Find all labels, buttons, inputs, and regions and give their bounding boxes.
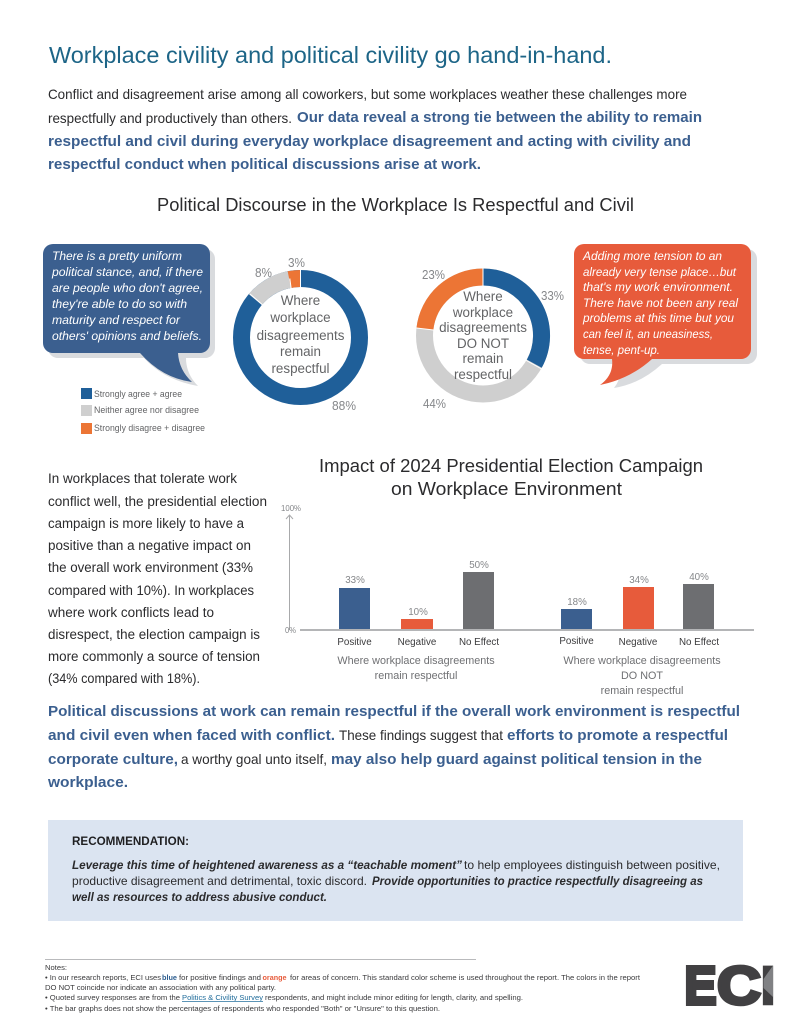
legend: Neither agree nor disagree [94, 405, 199, 415]
callout: negative quote: Adding more tension to an [582, 249, 722, 263]
callout: positive quote: maturity and respect for [52, 313, 181, 327]
bar chart: election impact: Where workplace disagreements [563, 655, 721, 667]
text block: election impact: more commonly a source of tension [48, 649, 260, 664]
conclusion paragraph: may also help guard against political tension in the [331, 751, 702, 768]
notes: for areas of concern. This standard color scheme is used throughout the report. The colors in the report [290, 973, 640, 982]
conclusion paragraph: corporate culture, [48, 751, 178, 768]
callout: positive quote [43, 244, 215, 386]
donut chart: disagreements do not remain respectful: workplace [452, 305, 513, 320]
heading: election impact chart [319, 456, 703, 499]
donut chart: disagreements do not remain respectful: 33% [541, 289, 564, 303]
donut chart: disagreements do not remain respectful: remain [463, 351, 503, 366]
callout: negative quote: problems at this time but you [582, 311, 734, 325]
heading: election impact chart: on Workplace Environment [391, 479, 622, 499]
bar chart: election impact: remain respectful [601, 685, 683, 697]
bar chart: election impact: 50% [469, 560, 489, 571]
text block: election impact: the overall work environment (33% [48, 560, 253, 575]
panel: recommendation: productive disagreement and detrimental, toxic discord. [72, 875, 367, 888]
donut chart: disagreements remain respectful: disagreements [257, 328, 345, 343]
notes: • The bar graphs does not show the percentages of respondents who responded "Both" or "Unsure" to this question. [45, 1004, 440, 1013]
panel: recommendation [48, 820, 743, 921]
text block: election impact: where work conflicts lead to [47, 605, 214, 620]
bar chart: election impact: 18% [567, 597, 587, 608]
text block: election impact: (34% compared with 18%). [48, 671, 200, 686]
conclusion paragraph: These findings suggest that [339, 728, 503, 743]
donut chart: disagreements do not remain respectful: 23% [422, 268, 445, 282]
donut chart: disagreements do not remain respectful: 44% [423, 397, 446, 411]
text block: election impact: disrespect, the election campaign is [48, 627, 260, 642]
notes: DO NOT coincide nor indicate an association with any political party. [45, 983, 276, 992]
notes: orange [262, 973, 286, 982]
donut chart: disagreements do not remain respectful: respectful [454, 367, 512, 382]
legend: Strongly agree + agree [94, 389, 182, 399]
bar chart: election impact: remain respectful [375, 670, 457, 682]
callout: negative quote: can feel it, an uneasiness, [583, 327, 713, 341]
callout: positive quote: are people who don't agree, [52, 281, 203, 295]
bar chart: election impact: 33% [345, 575, 365, 586]
donut chart: disagreements do not remain respectful: Where [463, 289, 503, 304]
text block: election impact: In workplaces that tolerate work [48, 471, 237, 486]
bar chart: election impact: No Effect [459, 637, 499, 648]
panel: recommendation: to help employees distinguish between positive, [464, 859, 720, 872]
donut chart: disagreements remain respectful: Where [281, 293, 320, 308]
conclusion paragraph: Political discussions at work can remain respectful if the overall work environment is respectful [48, 703, 740, 720]
bar chart: election impact: Positive [337, 637, 372, 648]
conclusion paragraph [47, 703, 740, 791]
notes: respondents, and might include minor editing for length, clarity, and spelling. [265, 993, 523, 1002]
notes: Politics & Civility Survey [182, 993, 263, 1002]
bar chart: election impact: Positive [559, 636, 594, 647]
intro paragraph: respectfully and productively than others. [48, 111, 292, 126]
bar chart: election impact: 34% [629, 575, 649, 586]
donut chart: disagreements remain respectful: respectful [271, 361, 330, 376]
donut chart: disagreements remain respectful: remain [280, 344, 321, 359]
notes: • Quoted survey responses are from the [45, 993, 180, 1002]
callout: negative quote: that's my work environment. [583, 280, 733, 294]
intro paragraph: Our data reveal a strong tie between the ability to remain [297, 109, 702, 126]
bar chart: election impact: Where workplace disagreements [337, 655, 495, 667]
text block: election impact: conflict well, the presidential election [48, 494, 267, 509]
notes: • In our research reports, ECI uses [45, 973, 161, 982]
bar chart: election impact: 100% [281, 504, 301, 513]
donut chart: disagreements remain respectful: workplace [269, 310, 331, 325]
heading: election impact chart: Impact of 2024 Presidential Election Campaign [319, 456, 703, 476]
callout: positive quote: they're able to do so with [52, 297, 187, 311]
conclusion paragraph: workplace. [47, 774, 128, 791]
bar chart: election impact [281, 504, 754, 697]
donut chart: disagreements remain respectful [242, 256, 360, 413]
callout: negative quote: tense, pent-up. [583, 343, 660, 357]
text block: election impact: campaign is more likely to have a [48, 516, 245, 531]
logo: ECI [684, 956, 776, 1016]
logo: ECI: I [760, 956, 776, 1016]
panel: recommendation: Leverage this time of heightened awareness as a “teachable moment” [72, 859, 462, 872]
legend: Strongly disagree + disagree [94, 423, 205, 433]
bar chart: election impact: Negative [619, 637, 658, 648]
text block: election impact: compared with 10%). In workplaces [48, 583, 254, 598]
intro paragraph [48, 87, 702, 173]
panel: recommendation: well as resources to address abusive conduct. [72, 891, 327, 904]
heading: political discourse: Political Discourse in the Workplace Is Respectful and Civil [157, 195, 634, 215]
conclusion paragraph: efforts to promote a respectful [507, 727, 728, 744]
callout: negative quote: There have not been any real [583, 296, 738, 310]
bar chart: election impact: 0% [285, 626, 296, 635]
text block: election impact [47, 471, 267, 686]
donut chart: disagreements remain respectful: 8% [255, 266, 272, 280]
callout: positive quote: others' opinions and beliefs. [52, 329, 202, 343]
callout: negative quote [574, 244, 757, 388]
bar chart: election impact: DO NOT [621, 670, 663, 682]
text block: election impact: positive than a negative impact on [48, 538, 251, 553]
callout: positive quote: There is a pretty uniform [52, 249, 182, 263]
bar chart: election impact: Negative [398, 637, 437, 648]
title: Workplace civility and political civility go hand-in-hand. [49, 42, 612, 68]
callout: positive quote: political stance, and, if there [51, 265, 203, 279]
intro paragraph: Conflict and disagreement arise among all coworkers, but some workplaces weather these challenges more [48, 87, 687, 102]
donut chart: disagreements remain respectful: 88% [332, 399, 356, 413]
notes [45, 959, 640, 1013]
notes: Notes: [45, 963, 67, 972]
bar chart: election impact: 40% [689, 572, 709, 583]
bar chart: election impact: No Effect [679, 637, 719, 648]
notes: for positive findings and [179, 973, 261, 982]
donut chart: disagreements do not remain respectful: DO NOT [457, 336, 509, 351]
conclusion paragraph: and civil even when faced with conflict. [48, 727, 335, 744]
legend [81, 388, 205, 434]
conclusion paragraph: a worthy goal unto itself, [181, 752, 327, 767]
donut chart: disagreements do not remain respectful: disagreements [439, 320, 527, 335]
intro paragraph: respectful conduct when political discussions arise at work. [48, 156, 481, 173]
logo: ECI: E [684, 956, 716, 1016]
logo: ECI: C [717, 956, 761, 1016]
notes: blue [162, 973, 177, 982]
donut chart: disagreements do not remain respectful [416, 268, 564, 411]
panel: recommendation: Provide opportunities to practice respectfully disagreeing as [372, 875, 704, 888]
bar chart: election impact: 10% [408, 607, 428, 618]
callout: negative quote: already very tense place…but [583, 265, 737, 279]
donut chart: disagreements remain respectful: 3% [288, 256, 305, 270]
panel: recommendation: RECOMMENDATION: [72, 835, 189, 848]
intro paragraph: respectful and civil during everyday workplace disagreement and acting with civility and [48, 133, 691, 150]
